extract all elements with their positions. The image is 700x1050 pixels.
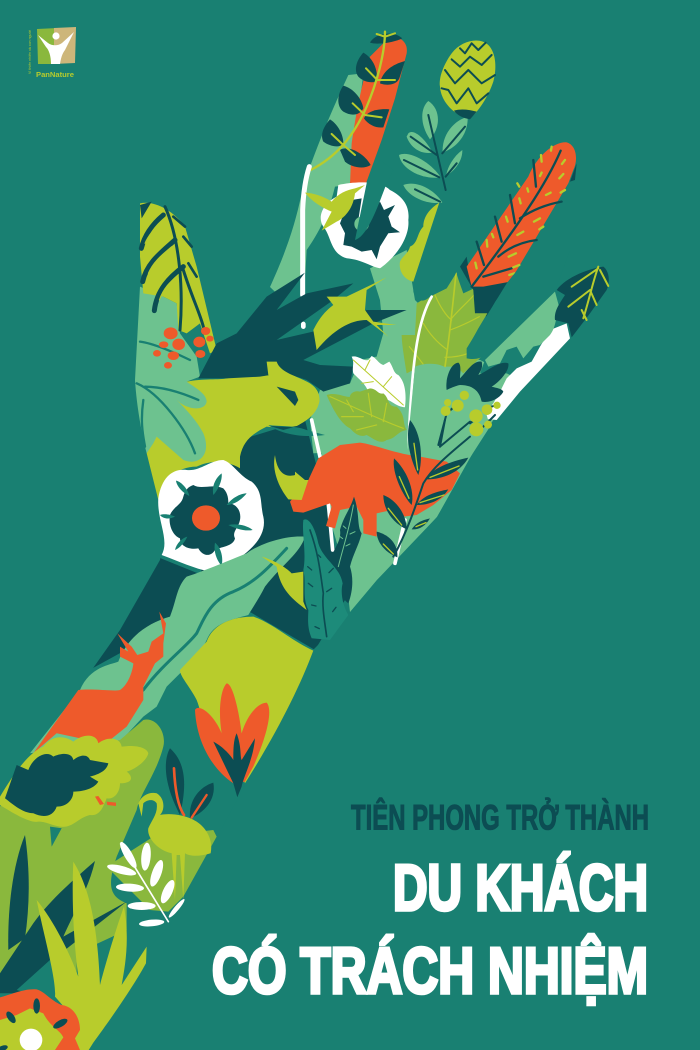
elephant — [147, 362, 319, 500]
red berries — [153, 327, 214, 369]
wavy band — [30, 536, 305, 753]
elephant trunk over the fan — [267, 362, 319, 426]
teal patterned leaf — [303, 519, 348, 640]
swallow — [313, 277, 397, 350]
rhinoceros — [274, 420, 460, 563]
lower arm — [0, 536, 313, 1050]
olive strip under flamingo — [107, 830, 217, 912]
mid-green palm areas — [310, 250, 520, 612]
lime grass — [37, 862, 147, 1050]
branch with lime-veined leaves — [377, 420, 470, 557]
lime strip — [400, 203, 439, 282]
logo: PanNature: Vì thiên nhiên và con người — [28, 30, 32, 74]
logo: PanNature: PanNature — [36, 70, 74, 79]
flower one with hummingbird — [305, 40, 495, 282]
olive oak leaf — [327, 388, 407, 442]
pine cone — [440, 40, 495, 119]
dark palm background — [93, 420, 345, 668]
dark leaves behind flamingo — [166, 748, 214, 818]
branch with mid-green leaves — [399, 101, 468, 203]
finger four: orange feather leaf — [460, 142, 577, 313]
olive leaf — [0, 720, 164, 987]
finger two with vine — [270, 32, 407, 327]
finger five — [407, 267, 609, 473]
dark patterned leaf — [332, 497, 362, 603]
lime bush — [0, 736, 148, 847]
white oak leaf — [352, 356, 406, 407]
mid-green blob and dark heart leaves — [407, 361, 509, 473]
deer — [33, 612, 166, 753]
plants over the palm edge — [262, 420, 470, 640]
elephant tusk — [268, 425, 325, 436]
dark spike leaves — [0, 835, 127, 1013]
bottom flower — [0, 989, 80, 1050]
lime hill — [180, 617, 313, 783]
lime berries — [438, 391, 501, 447]
overlay: gaps between fingers — [413, 250, 570, 359]
thumb — [135, 202, 407, 500]
small lime bird — [262, 557, 307, 610]
white branch — [106, 840, 186, 927]
orange plant — [195, 683, 269, 797]
logo: PanNature — [28, 27, 76, 79]
flamingo — [138, 793, 211, 900]
mid-green thumb base — [135, 287, 207, 462]
lime fern leaf — [140, 203, 217, 353]
dark fan leaves — [198, 273, 407, 392]
finger three: olive leaf — [402, 268, 507, 373]
flower two — [158, 460, 264, 574]
